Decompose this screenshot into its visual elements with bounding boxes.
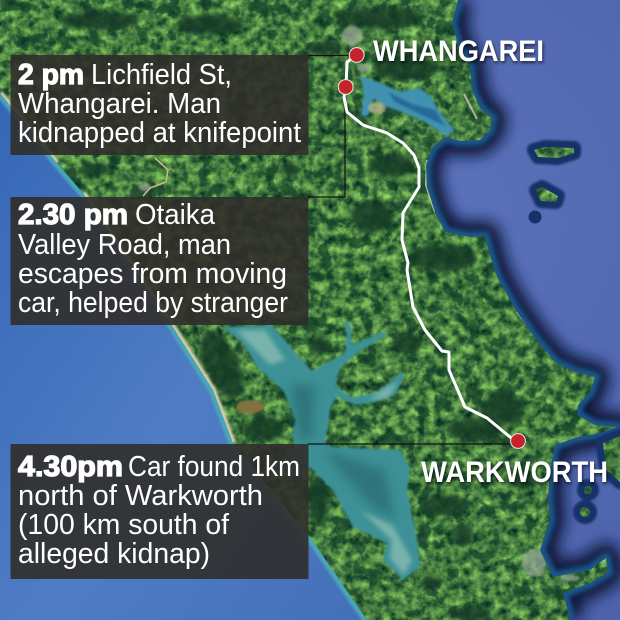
marker: Otaika Valley Road <box>338 80 353 94</box>
panel: 4.30pm: Car found 1km <box>128 451 300 483</box>
small dark islet <box>528 210 542 224</box>
leader lines <box>308 56 512 444</box>
panel: 4.30pm: 4.30pm <box>18 451 123 483</box>
marker: Warkworth <box>511 434 525 448</box>
panel: 4.30pm: alleged kidnap) <box>18 538 210 570</box>
panel: 2.30 pm: car, helped by stranger <box>18 287 288 319</box>
west coast shoreline <box>0 93 367 620</box>
route line <box>344 55 518 441</box>
marker: Whangarei <box>349 48 364 62</box>
panel: 2 pm <box>10 55 308 155</box>
Whangarei Harbour dark channel <box>388 92 445 126</box>
panel: 2.30 pm: escapes from moving <box>18 258 287 290</box>
west coast sand <box>0 93 233 443</box>
label: Whangarei: WHANGAREI <box>373 35 544 68</box>
panel: 2 pm: 2 pm <box>18 59 84 91</box>
Kaipara light shallows <box>236 330 412 575</box>
coastal shallow water band <box>426 0 620 620</box>
Whangarei mudflats <box>368 102 386 114</box>
dark channel in harbour <box>290 385 395 520</box>
panel: 2.30 pm: 2.30 pm <box>18 199 128 231</box>
islands dark halo <box>534 147 620 517</box>
panel: 2.30 pm <box>10 197 308 325</box>
panel: 4.30pm <box>10 444 308 579</box>
panel: 4.30pm: (100 km south of <box>18 509 230 541</box>
brown patch on peninsula <box>236 400 264 414</box>
label: Warkworth: WARKWORTH <box>421 456 608 489</box>
east coast dark shadow halo <box>426 0 617 620</box>
town and sand patches <box>139 26 580 581</box>
east beaches <box>426 94 553 358</box>
Kaipara Harbour <box>223 322 420 580</box>
forest patches <box>60 7 534 620</box>
panel: 2 pm: kidnapped at knifepoint <box>18 117 301 149</box>
river inlet <box>143 158 168 196</box>
Whangarei Harbour <box>361 76 455 135</box>
panel: 4.30pm: north of Warkworth <box>18 480 263 512</box>
panel: 2 pm: Whangarei. Man <box>18 88 221 120</box>
panel: 2.30 pm: Otaika <box>135 199 216 231</box>
panel: 2.30 pm: Valley Road, man <box>18 229 231 261</box>
west sea <box>0 93 367 620</box>
panel: 2 pm: Lichfield St, <box>91 59 232 91</box>
